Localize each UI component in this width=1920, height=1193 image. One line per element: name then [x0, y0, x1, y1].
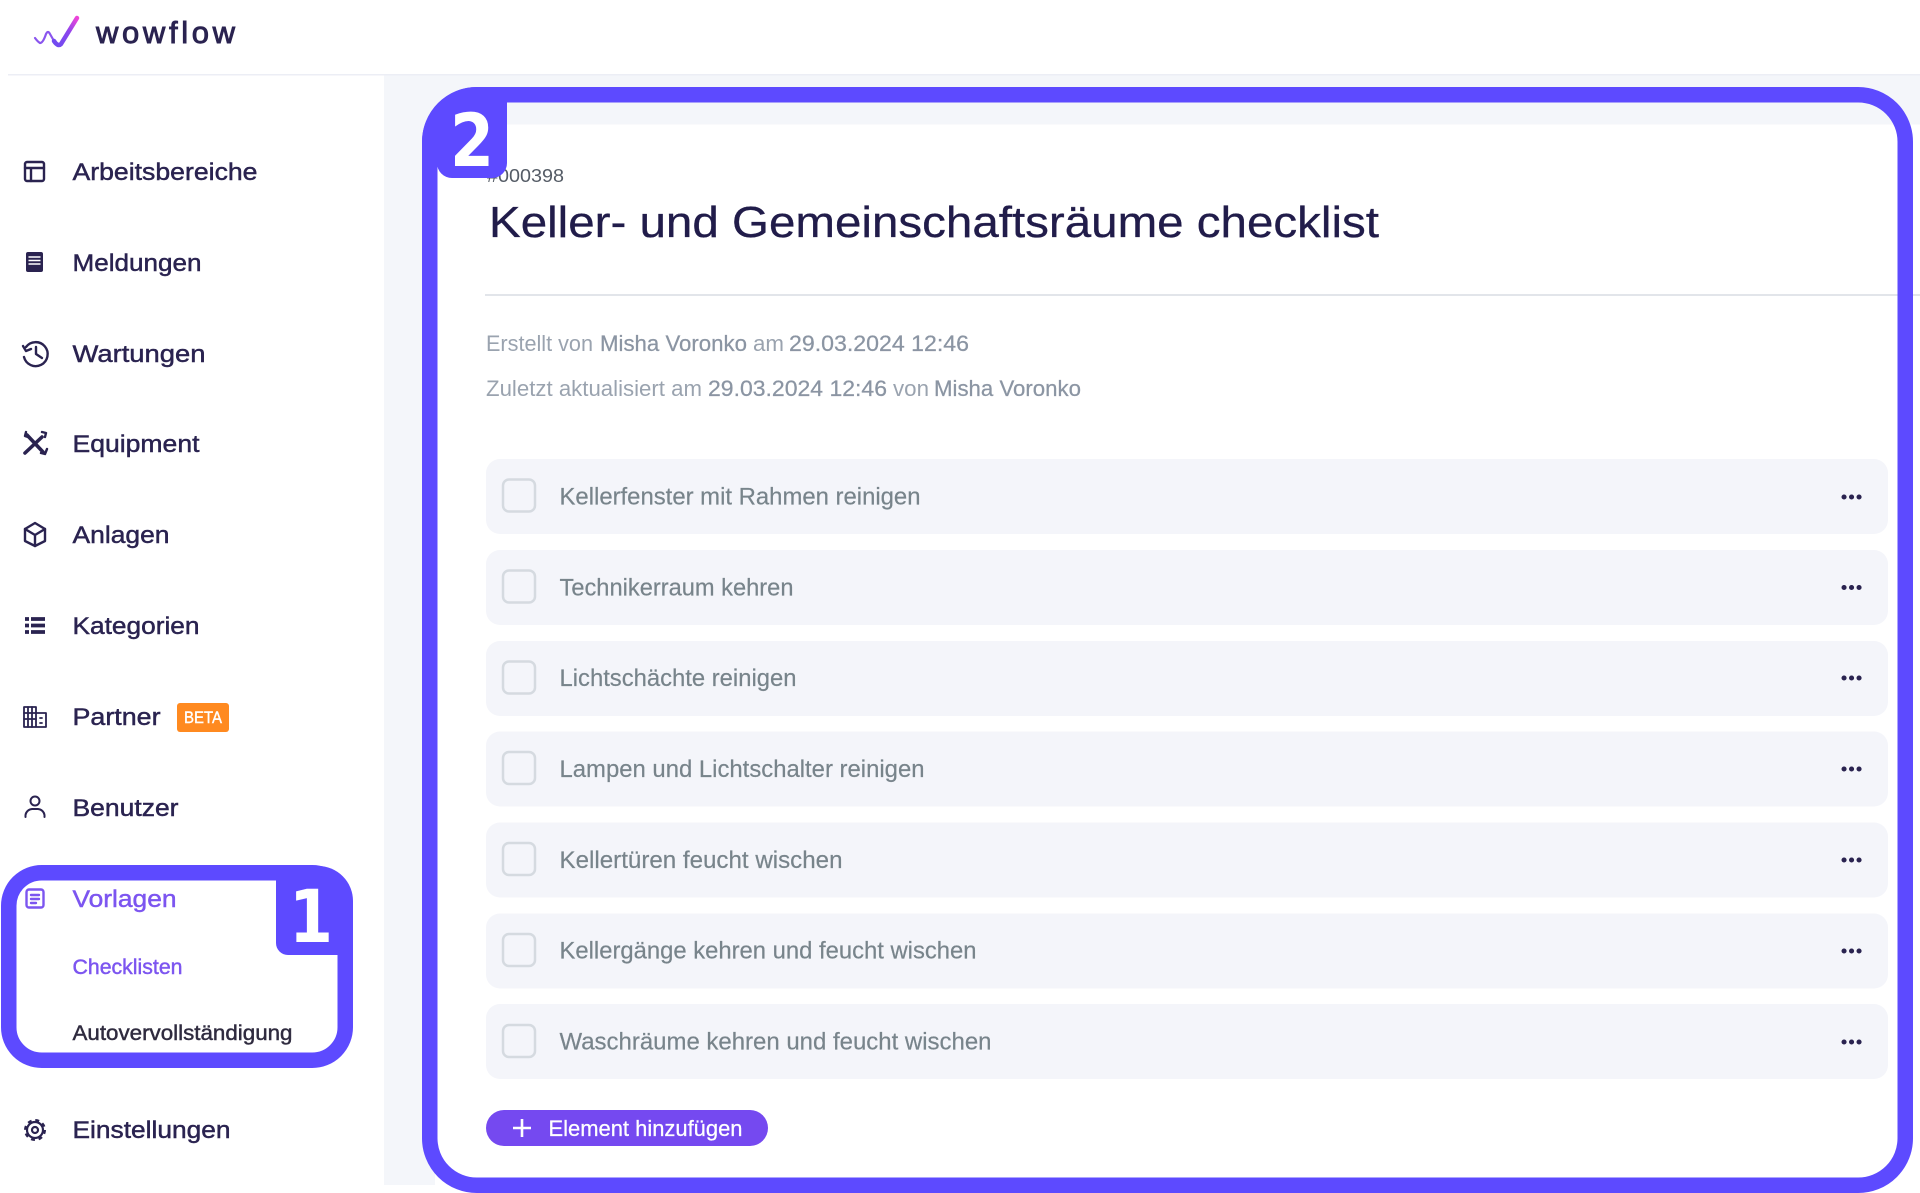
checklist item 4 [486, 732, 1888, 806]
nav item: Anlagen: Anlagen [72, 522, 170, 549]
updated meta text: von [893, 376, 929, 401]
nav item: Arbeitsbereiche: Arbeitsbereiche [72, 159, 258, 186]
updated meta text: Zuletzt aktualisiert am [486, 376, 702, 401]
checklist item 1: Kellerfenster mit Rahmen reinigen [560, 484, 920, 510]
logo mark [35, 18, 77, 45]
nav item: Equipment [25, 431, 200, 458]
checklist item 3: Lichtschächte reinigen [560, 665, 796, 692]
nav item: Vorlagen [26, 886, 176, 913]
checklist item 6: Kellergänge kehren und feucht wischen [560, 938, 976, 964]
nav item: Kategorien: Kategorien [72, 613, 200, 640]
nav item: Vorlagen: Vorlagen [72, 886, 176, 913]
nav item: Benutzer [26, 795, 179, 822]
checklist item 3 [486, 641, 1888, 716]
checklist item 2: Technikerraum kehren [560, 574, 794, 602]
created meta text: Erstellt von [486, 331, 593, 356]
button: Element hinzufügen: Element hinzufügen [548, 1116, 742, 1141]
nav item: Meldungen: Meldungen [72, 250, 202, 277]
number badge 1: 1 [289, 875, 333, 960]
updated meta text [486, 376, 1081, 401]
checklist item 7: Waschräume kehren und feucht wischen [560, 1028, 992, 1056]
checklist item 7 [486, 1004, 1888, 1079]
highlight frame 1: Vorlagen menu [9, 866, 353, 1060]
updated meta text: Misha Voronko [934, 376, 1081, 401]
sidebar navigation [23, 159, 292, 1144]
nav item: Partner: Partner [72, 704, 161, 731]
nav item: Meldungen [26, 250, 202, 277]
created meta text: 29.03.2024 12:46 [789, 331, 969, 356]
checklist item 2 [486, 550, 1888, 625]
checklist item 5: Kellertüren feucht wischen [560, 847, 842, 874]
updated meta text: 29.03.2024 12:46 [708, 376, 887, 401]
number badge 1 [276, 866, 353, 960]
panel: checklist card [435, 124, 1920, 1193]
checklist item 4: Lampen und Lichtschalter reinigen [560, 756, 924, 783]
nav sub-item: Checklisten: Checklisten [72, 956, 182, 979]
number badge 2 [422, 87, 507, 184]
nav item: Anlagen [25, 522, 170, 549]
nav item: Einstellungen: Einstellungen [72, 1117, 230, 1144]
created meta text [486, 331, 969, 356]
checklist item 5 [486, 822, 1888, 898]
nav item: Benutzer: Benutzer [72, 795, 179, 822]
button: Element hinzufügen [486, 1110, 768, 1146]
number badge 2: 2 [450, 99, 494, 184]
nav item: Wartungen: Wartungen [72, 341, 206, 368]
nav item: Wartungen [23, 341, 206, 368]
checklist id: #000398 [487, 166, 564, 186]
created meta text: am [753, 331, 784, 356]
nav sub-item: Autovervollständigung: Autovervollständigung [72, 1022, 292, 1045]
nav item: Kategorien [25, 613, 200, 640]
highlight frame 2: checklist [422, 87, 1905, 1185]
checklist item 6 [486, 914, 1888, 988]
badge: BETA [177, 703, 229, 732]
created meta text: Misha Voronko [600, 331, 747, 356]
checklist item 1 [486, 459, 1888, 534]
logo [35, 15, 236, 50]
badge: BETA: BETA [184, 708, 223, 727]
title: Keller- und Gemeinschaftsräume checklist [489, 198, 1379, 247]
nav item: Partner [24, 703, 229, 732]
logo wordmark: wowflow [95, 15, 236, 50]
nav item: Equipment: Equipment [72, 431, 200, 458]
